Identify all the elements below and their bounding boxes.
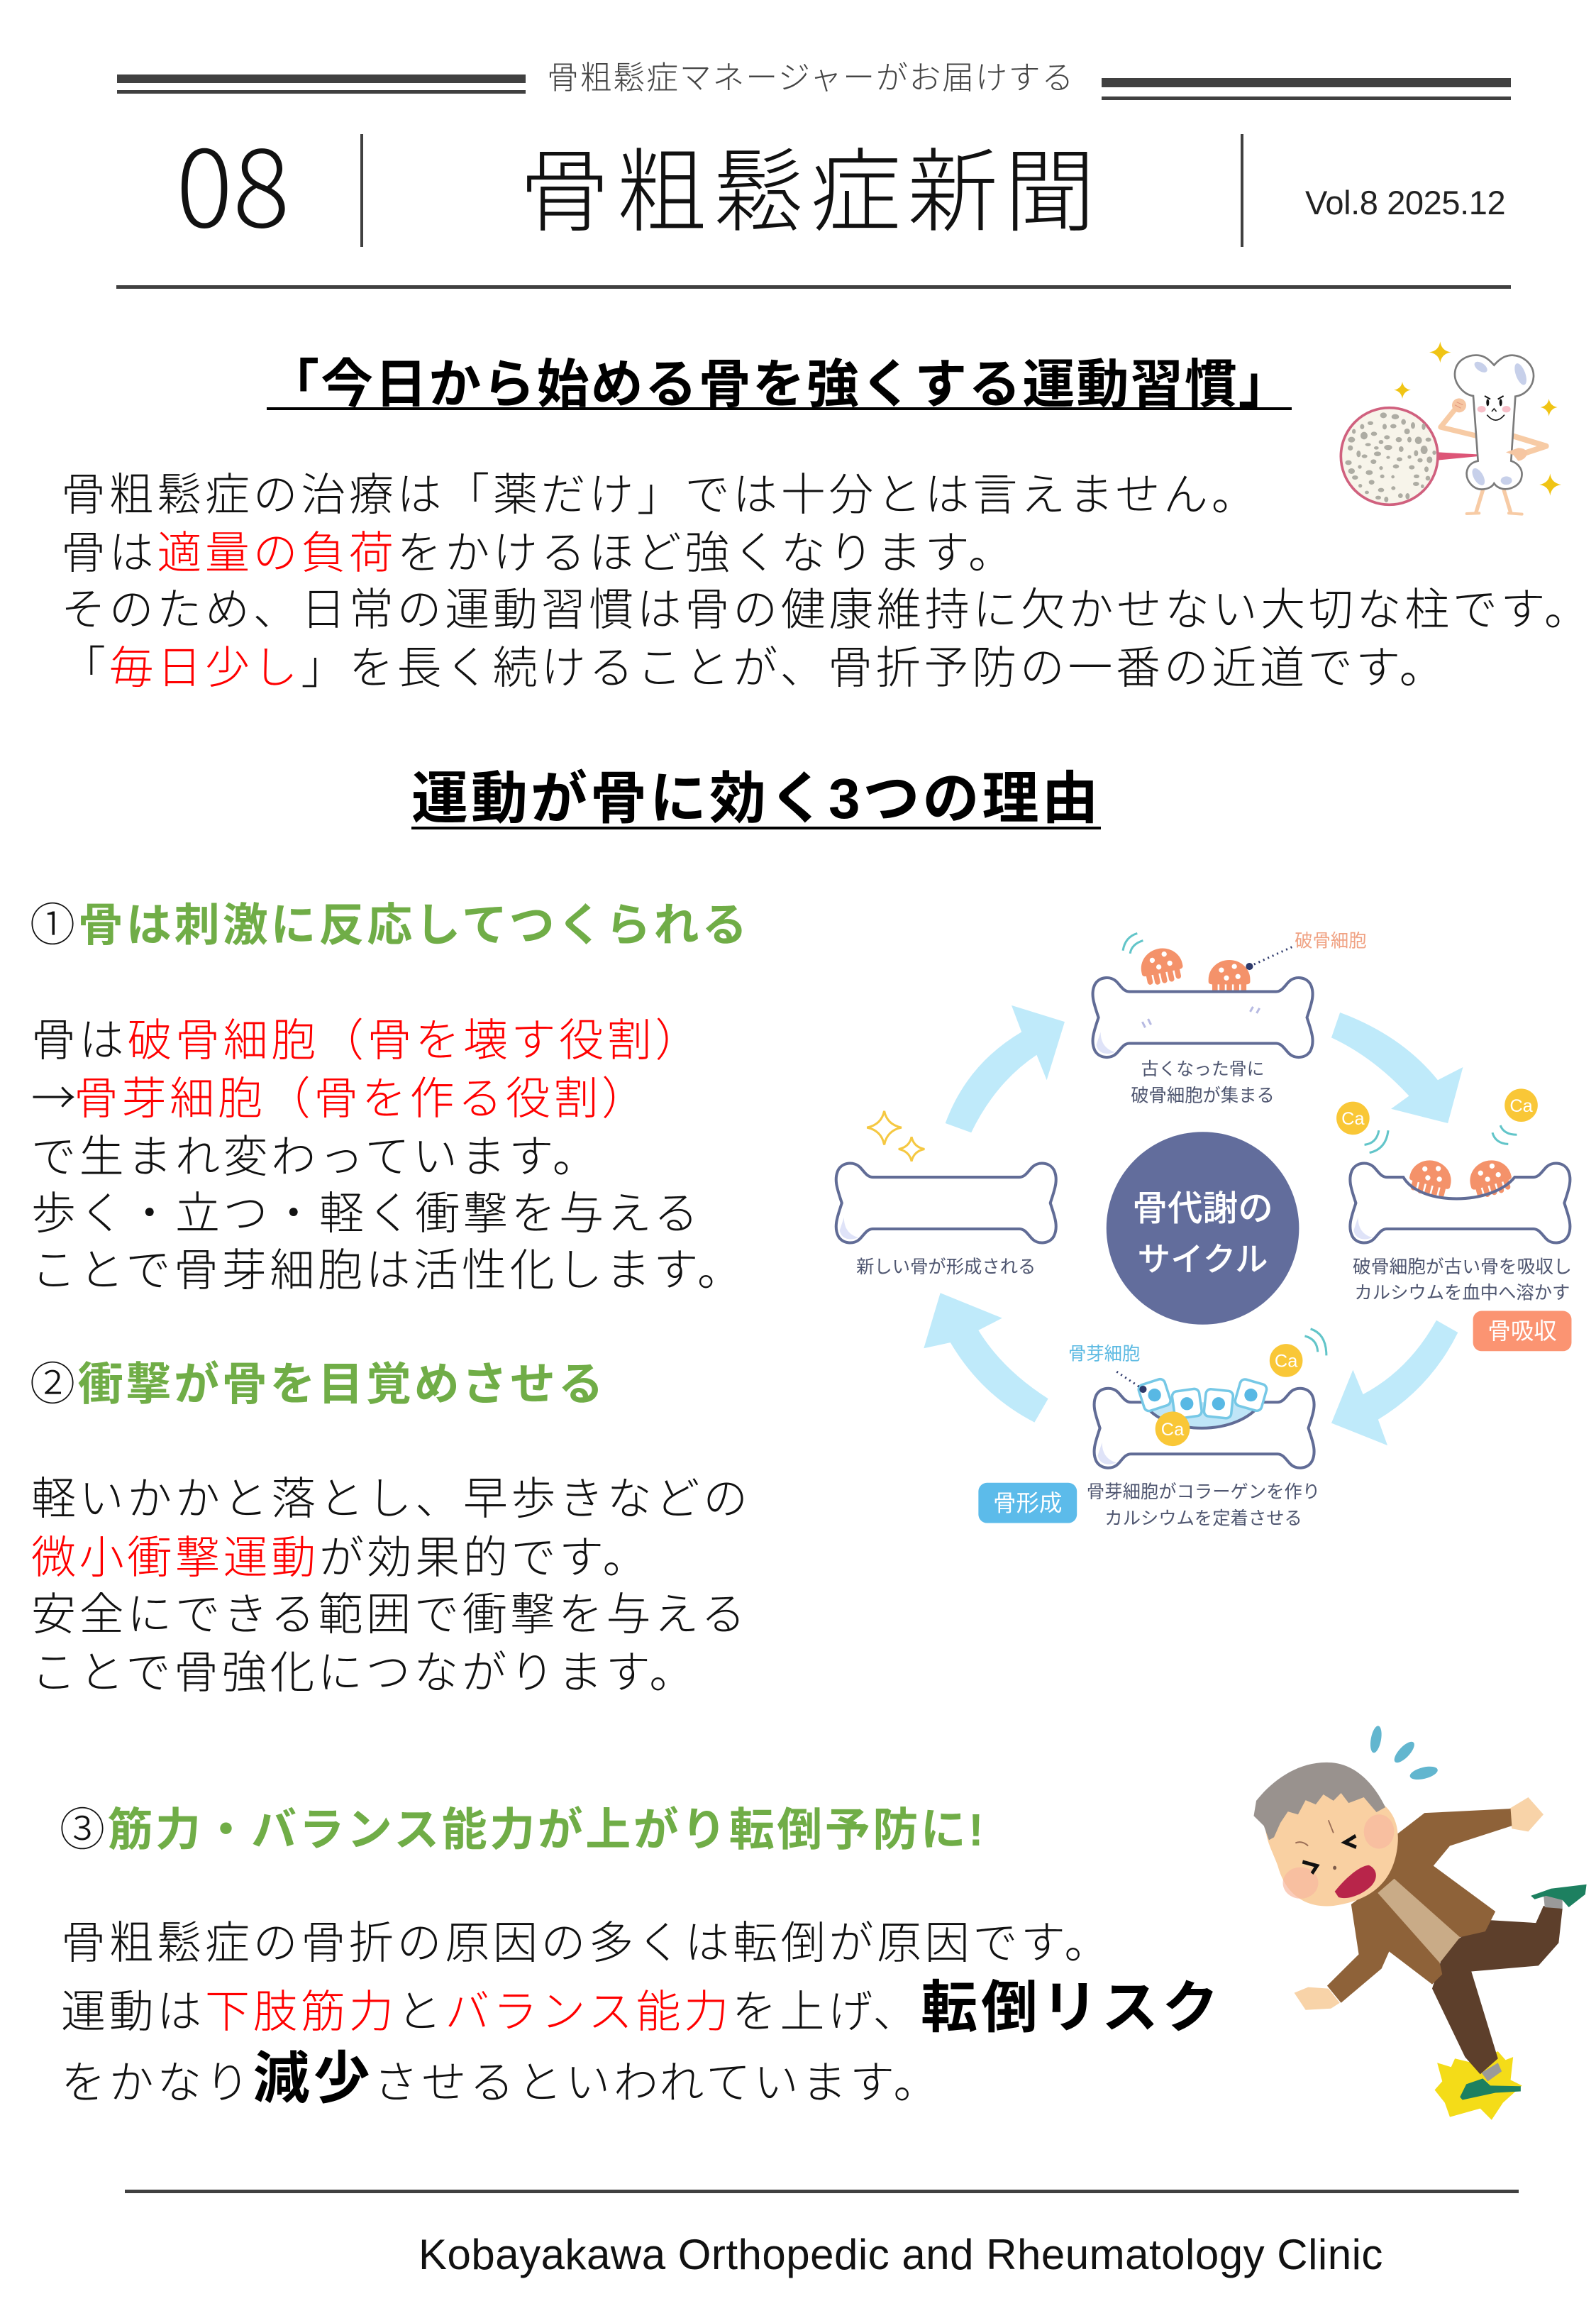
intro paragraph: 骨粗鬆症の治療は「薬だけ」では十分とは言えません。 xyxy=(61,470,1259,520)
reason 3 body xyxy=(61,1919,1222,2110)
face xyxy=(1478,406,1486,412)
reason 3 body: をかなり減少させるといわれています。 xyxy=(61,2047,941,2110)
left bone: new bone with sparkles xyxy=(836,1111,1056,1243)
volume and date: Vol.8 2025.12 xyxy=(1305,184,1505,221)
reason 1 body: ことで骨芽細胞は活性化します。 xyxy=(31,1246,746,1296)
reason 3 body: 骨粗鬆症の骨折の原因の多くは転倒が原因です。 xyxy=(61,1919,1112,1968)
reason 1 body: → xyxy=(31,1063,79,1127)
reason 2 body: 安全にできる範囲で衝撃を与える xyxy=(31,1590,749,1640)
footer rule xyxy=(125,2190,1519,2193)
reason 2 body: 微小衝撃運動が効果的です。 xyxy=(31,1533,650,1583)
hair xyxy=(1253,1762,1385,1840)
caption: formation line 1: 骨芽細胞がコラーゲンを作り xyxy=(1087,1482,1320,1502)
divider right xyxy=(1241,134,1243,247)
header bottom rule xyxy=(116,285,1511,289)
impact burst xyxy=(1435,2051,1522,2120)
illustration: strong bone character xyxy=(1339,342,1561,516)
footer: clinic name: Kobayakawa Orthopedic and Rheumatology Clinic xyxy=(419,2231,1383,2278)
reason 3 heading: ③筋力・バランス能力が上がり転倒予防に! xyxy=(60,1804,986,1855)
section heading: three reasons: 運動が骨に効く3つの理由 xyxy=(411,767,1101,830)
caption: resorption line 2: カルシウムを血中へ溶かす xyxy=(1354,1283,1570,1303)
reason 2 heading: ②衝撃が骨を目覚めさせる xyxy=(30,1359,606,1410)
caption: resorption line 1: 破骨細胞が古い骨を吸収し xyxy=(1353,1257,1572,1277)
bone metabolism cycle diagram xyxy=(834,931,1572,1529)
reason 3 body: 運動は下肢筋力とバランス能力を上げ、転倒リスク xyxy=(61,1976,1222,2039)
face details xyxy=(1345,1836,1356,1847)
reason 1 heading: ①骨は刺激に反応してつくられる xyxy=(30,900,750,951)
divider left xyxy=(360,134,363,247)
pointing hand xyxy=(1506,448,1528,461)
caption: formation line 2: カルシウムを定着させる xyxy=(1104,1509,1302,1529)
bone body xyxy=(1455,355,1534,490)
micro-detail: magnified circle xyxy=(1341,408,1490,504)
caption: new bone formed: 新しい骨が形成される xyxy=(856,1257,1036,1277)
header rule: left xyxy=(117,75,526,94)
badge: bone formation: 骨形成 xyxy=(993,1490,1062,1516)
newspaper title: 骨粗鬆症新聞 xyxy=(519,142,1102,243)
right bone: resorption: Ca xyxy=(1509,1096,1534,1116)
intro paragraph: そのため、日常の運動習慣は骨の健康維持に欠かせない大切な柱です。 xyxy=(61,585,1592,635)
pants xyxy=(1432,1906,1563,2074)
bottom bone: formation with osteoblasts: Ca xyxy=(1161,1420,1185,1440)
caption: old bone: 古くなった骨に xyxy=(1141,1059,1264,1079)
arrow: resorption to top right xyxy=(1331,1013,1463,1123)
top bone with osteoclasts xyxy=(1093,933,1313,1057)
reason 2 body: ことで骨強化につながります。 xyxy=(31,1648,697,1698)
reason 1 body: 骨は破骨細胞（骨を壊す役割） xyxy=(31,1016,703,1066)
badge: bone resorption xyxy=(1473,1311,1571,1351)
intro paragraph xyxy=(61,470,1592,693)
reason 1 body: 骨芽細胞（骨を作る役割） xyxy=(74,1074,650,1124)
arrow: new bone to old bone xyxy=(946,1005,1065,1132)
right bone: resorption: Ca xyxy=(1341,1109,1365,1129)
bottom bone: formation with osteoblasts xyxy=(1095,1329,1326,1468)
socks and shoes xyxy=(1544,1894,1563,1909)
reason 2 body xyxy=(31,1474,751,1698)
head xyxy=(1265,1786,1398,1906)
reason 2 body: 軽いかかと落とし、早歩きなどの xyxy=(31,1474,751,1524)
right bone: resorption xyxy=(1336,1088,1570,1243)
header rule: right xyxy=(1102,78,1511,100)
caption: osteoclasts gather: 破骨細胞が集まる xyxy=(1131,1086,1275,1106)
illustration: falling elderly man xyxy=(1254,1726,1587,2120)
hands xyxy=(1509,1797,1544,1831)
center circle: bone metabolism cycle: サイクル xyxy=(1138,1241,1268,1278)
sparkles xyxy=(1394,341,1561,496)
subtitle: 骨粗鬆症マネージャーがお届けする xyxy=(547,60,1075,96)
arrow: resorption to formation xyxy=(1331,1320,1458,1445)
sweat drops xyxy=(1368,1725,1439,1782)
arrow: formation to new bone xyxy=(924,1293,1048,1423)
label: osteoblast: 骨芽細胞 xyxy=(1068,1344,1140,1364)
sweater xyxy=(1378,1879,1460,1963)
jacket xyxy=(1327,1809,1512,2003)
reason 1 body: 歩く・立つ・軽く衝撃を与える xyxy=(31,1189,702,1239)
reason 1 body: で生まれ変わっています。 xyxy=(31,1132,600,1182)
issue number: 08 xyxy=(176,104,290,258)
badge: bone formation xyxy=(978,1483,1077,1523)
intro paragraph: 「毎日少し」を長く続けることが、骨折予防の一番の近道です。 xyxy=(61,644,1447,693)
arms xyxy=(1441,410,1546,514)
center circle: bone metabolism cycle xyxy=(1107,1132,1299,1325)
bottom bone: formation with osteoblasts: Ca xyxy=(1275,1352,1298,1372)
intro paragraph: 骨は適量の負荷をかけるほど強くなります。 xyxy=(61,529,1016,578)
center circle: bone metabolism cycle: 骨代謝の xyxy=(1132,1188,1273,1228)
label: osteoclast: 破骨細胞 xyxy=(1295,932,1367,951)
main heading: 「今日から始める骨を強くする運動習慣」 xyxy=(267,355,1292,414)
reason 1 body xyxy=(31,1016,746,1296)
badge: bone resorption: 骨吸収 xyxy=(1487,1318,1557,1344)
